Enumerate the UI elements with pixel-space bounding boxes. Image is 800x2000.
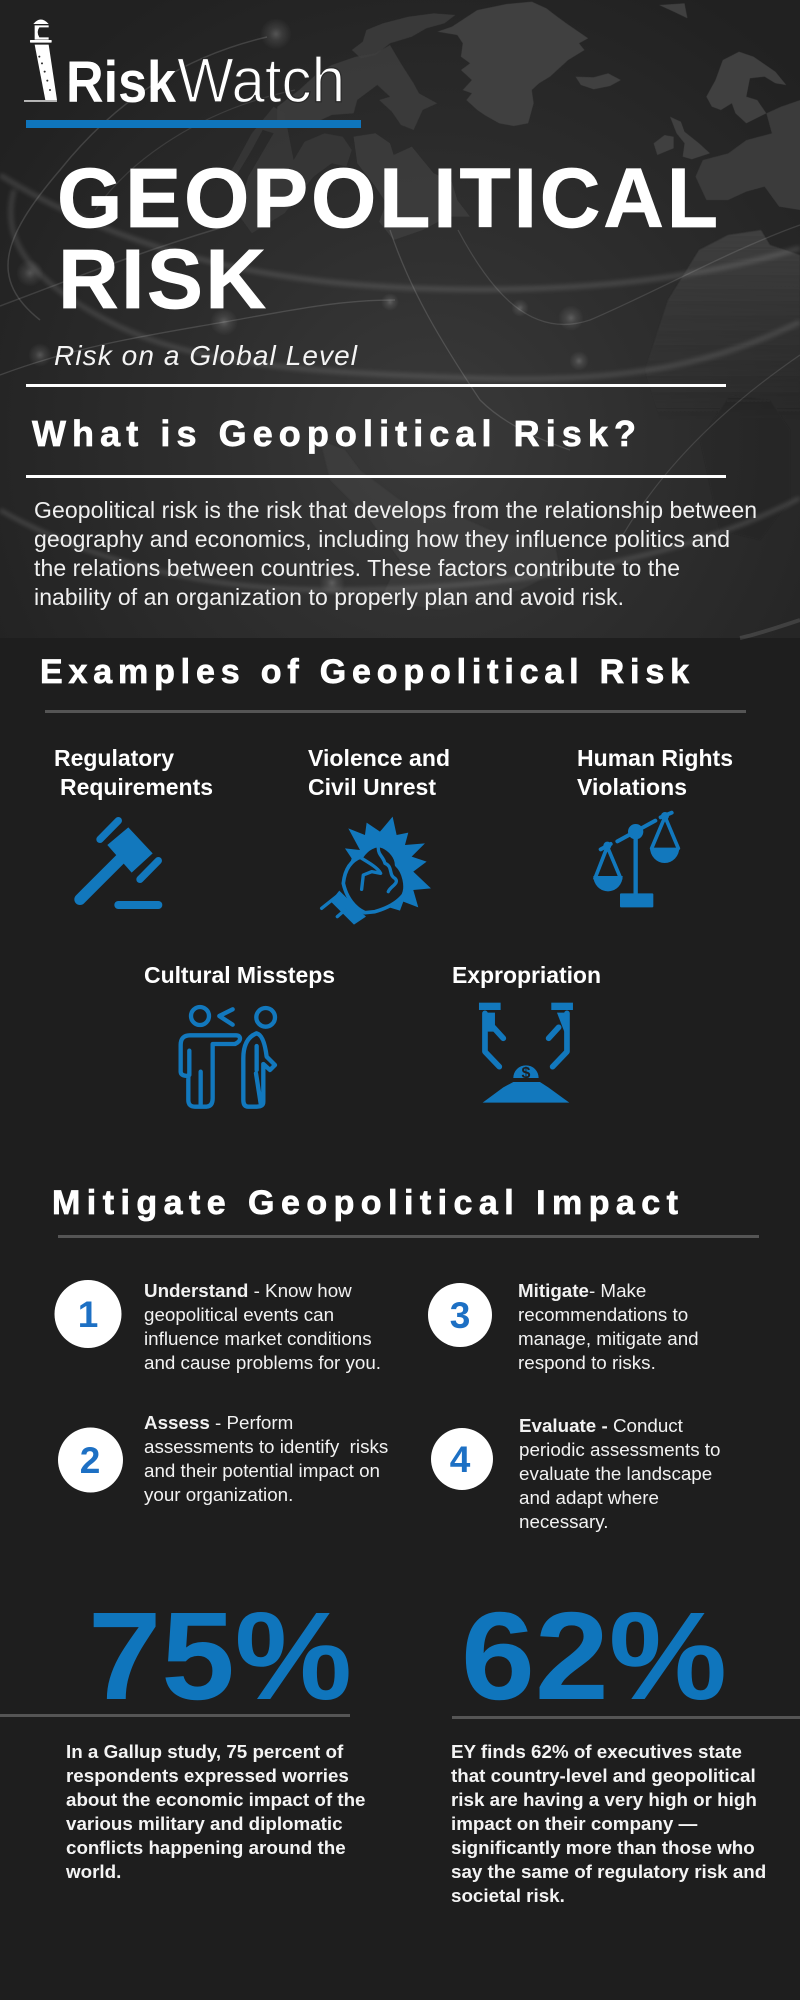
step 2: and their potential impact on <box>144 1460 380 1481</box>
stat: 75 percent: world. <box>65 1861 121 1882</box>
step 4: necessary. <box>519 1511 608 1532</box>
label: human rights violations: Violations <box>577 774 687 800</box>
step 3: Mitigate- Make <box>518 1280 646 1301</box>
step 2: 2 <box>80 1440 100 1481</box>
step 3: respond to risks. <box>518 1352 656 1373</box>
blue logo underline <box>26 120 361 128</box>
heading: examples: Examples of Geopolitical Risk <box>40 653 689 691</box>
africa and faint lower land <box>320 230 800 610</box>
icon: gavel <box>80 821 158 905</box>
label: violence and civil unrest: Civil Unrest <box>308 774 436 800</box>
stat: 75 percent: about the economic impact of the <box>66 1789 365 1810</box>
panel: examples <box>40 653 746 1107</box>
stat: 75 percent: conflicts happening around the <box>66 1837 346 1858</box>
step 4 <box>431 1415 720 1532</box>
icon: lighthouse <box>24 19 57 102</box>
step 3: manage, mitigate and <box>518 1328 699 1349</box>
label: expropriation: Expropriation <box>452 962 601 988</box>
stat: 62 percent: impact on their company — <box>451 1813 698 1834</box>
stat: 62 percent: say the same of regulatory risk and <box>451 1861 766 1882</box>
glowing nodes <box>16 18 589 596</box>
icon: two people <box>181 1007 275 1107</box>
label: violence and civil unrest <box>308 745 450 800</box>
heading: mitigate: Mitigate Geopolitical Impact <box>52 1184 678 1222</box>
step 1: and cause problems for you. <box>144 1352 381 1373</box>
step 2: assessments to identify risks <box>144 1436 388 1457</box>
step 1: influence market conditions <box>144 1328 372 1349</box>
step 1: geopolitical events can <box>144 1304 334 1325</box>
heading: what is geopolitical risk: What is Geopolitical Risk? <box>32 413 636 454</box>
stat: 62 percent: that country-level and geopolitical <box>451 1765 756 1786</box>
definition paragraph: the relations between countries. These factors contribute to the <box>34 555 680 581</box>
step 3: recommendations to <box>518 1304 688 1325</box>
step 4: periodic assessments to <box>519 1439 720 1460</box>
title: GEOPOLITICAL <box>57 151 718 245</box>
logo: RiskWatch <box>24 19 345 116</box>
icon: fist <box>322 817 431 925</box>
definition paragraph: Geopolitical risk is the risk that develops from the relationship between <box>34 497 757 523</box>
step 1: Understand - Know how <box>144 1280 352 1301</box>
step 4: 4 <box>450 1439 471 1480</box>
step 1: 1 <box>78 1294 98 1335</box>
icon: hands taking money: $ <box>522 1065 531 1082</box>
stat: 75 percent: various military and diplomatic <box>66 1813 343 1834</box>
stat: 75 percent <box>0 1587 365 1882</box>
label: regulatory requirements: Regulatory <box>54 745 174 771</box>
step 3 <box>428 1280 699 1373</box>
stat: 62 percent: societal risk. <box>451 1885 565 1906</box>
icon: scales <box>593 812 679 907</box>
label: cultural missteps: Cultural Missteps <box>144 962 335 988</box>
stat: 62 percent: significantly more than those who <box>451 1837 755 1858</box>
title <box>57 151 718 326</box>
stat: 62 percent: EY finds 62% of executives state <box>451 1741 742 1762</box>
label: human rights violations <box>577 745 733 800</box>
panel: hero globe background <box>0 0 800 638</box>
step 4: evaluate the landscape <box>519 1463 712 1484</box>
definition paragraph: geography and economics, including how they influence politics and <box>34 526 730 552</box>
step 2 <box>58 1412 388 1505</box>
stat: 62 percent: 62% <box>461 1587 727 1726</box>
label: regulatory requirements: Requirements <box>60 774 213 800</box>
label: violence and civil unrest: Violence and <box>308 745 450 771</box>
stat: 75 percent: In a Gallup study, 75 percent of <box>66 1741 344 1762</box>
divider bottom <box>26 475 726 478</box>
label: regulatory requirements <box>54 745 213 800</box>
step 2: Assess - Perform <box>144 1412 293 1433</box>
panel: mitigate <box>52 1184 759 1532</box>
step 1 <box>54 1280 381 1373</box>
divider top <box>26 384 726 387</box>
stat: 62 percent: risk are having a very high or high <box>451 1789 757 1810</box>
logo: RiskWatch: Watch <box>177 46 345 116</box>
title: RISK <box>58 232 266 326</box>
step 2: your organization. <box>144 1484 293 1505</box>
icon: hands taking money <box>479 1003 573 1103</box>
stat: 62 percent <box>451 1587 800 1906</box>
step 4: Evaluate - Conduct <box>519 1415 684 1436</box>
stat: 75 percent: respondents expressed worries <box>66 1765 349 1786</box>
definition paragraph <box>34 497 757 610</box>
label: human rights violations: Human Rights <box>577 745 733 771</box>
stat: 75 percent: 75% <box>88 1587 352 1726</box>
subtitle: Risk on a Global Level <box>54 340 358 371</box>
step 4: and adapt where <box>519 1487 659 1508</box>
definition paragraph: inability of an organization to properly plan and avoid risk. <box>34 584 624 610</box>
orbit arcs <box>0 37 800 638</box>
wordmark: Risk <box>66 50 177 115</box>
step 3: 3 <box>450 1295 470 1336</box>
